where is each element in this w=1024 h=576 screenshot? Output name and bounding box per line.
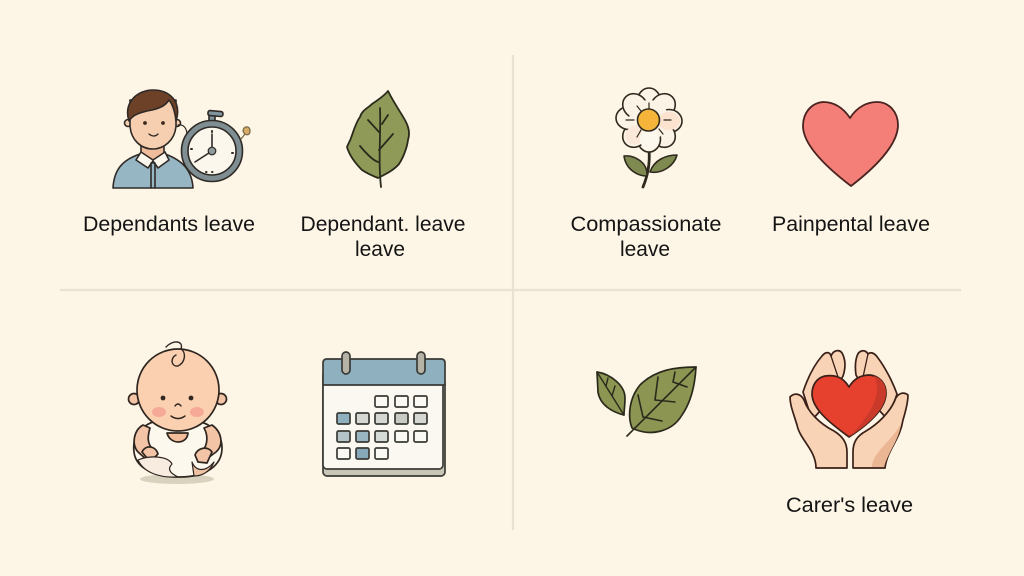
label: Carer's leave: Carer's leave — [786, 494, 913, 517]
label: Painpental leave: Painpental leave — [772, 213, 930, 236]
label: Compassionate leave — [570, 213, 722, 261]
label: Dependant. leave leave: Dependant. leave — [300, 213, 466, 236]
icon: person with stopwatch — [113, 90, 250, 188]
icon: green leaf — [347, 91, 409, 187]
icon: pink heart — [803, 102, 898, 186]
label: Compassionate leave: leave — [620, 238, 670, 261]
icon: two green leaves — [597, 367, 696, 436]
label: Dependant. leave leave — [300, 213, 466, 261]
label: Dependant. leave leave: leave — [355, 238, 405, 261]
icon: calendar — [323, 352, 445, 476]
label: Compassionate leave: Compassionate — [570, 213, 722, 236]
icon: hands holding heart — [790, 351, 908, 468]
label: Dependants leave: Dependants leave — [83, 213, 255, 236]
icon: daisy flower — [616, 88, 682, 187]
icon: baby — [128, 342, 226, 484]
